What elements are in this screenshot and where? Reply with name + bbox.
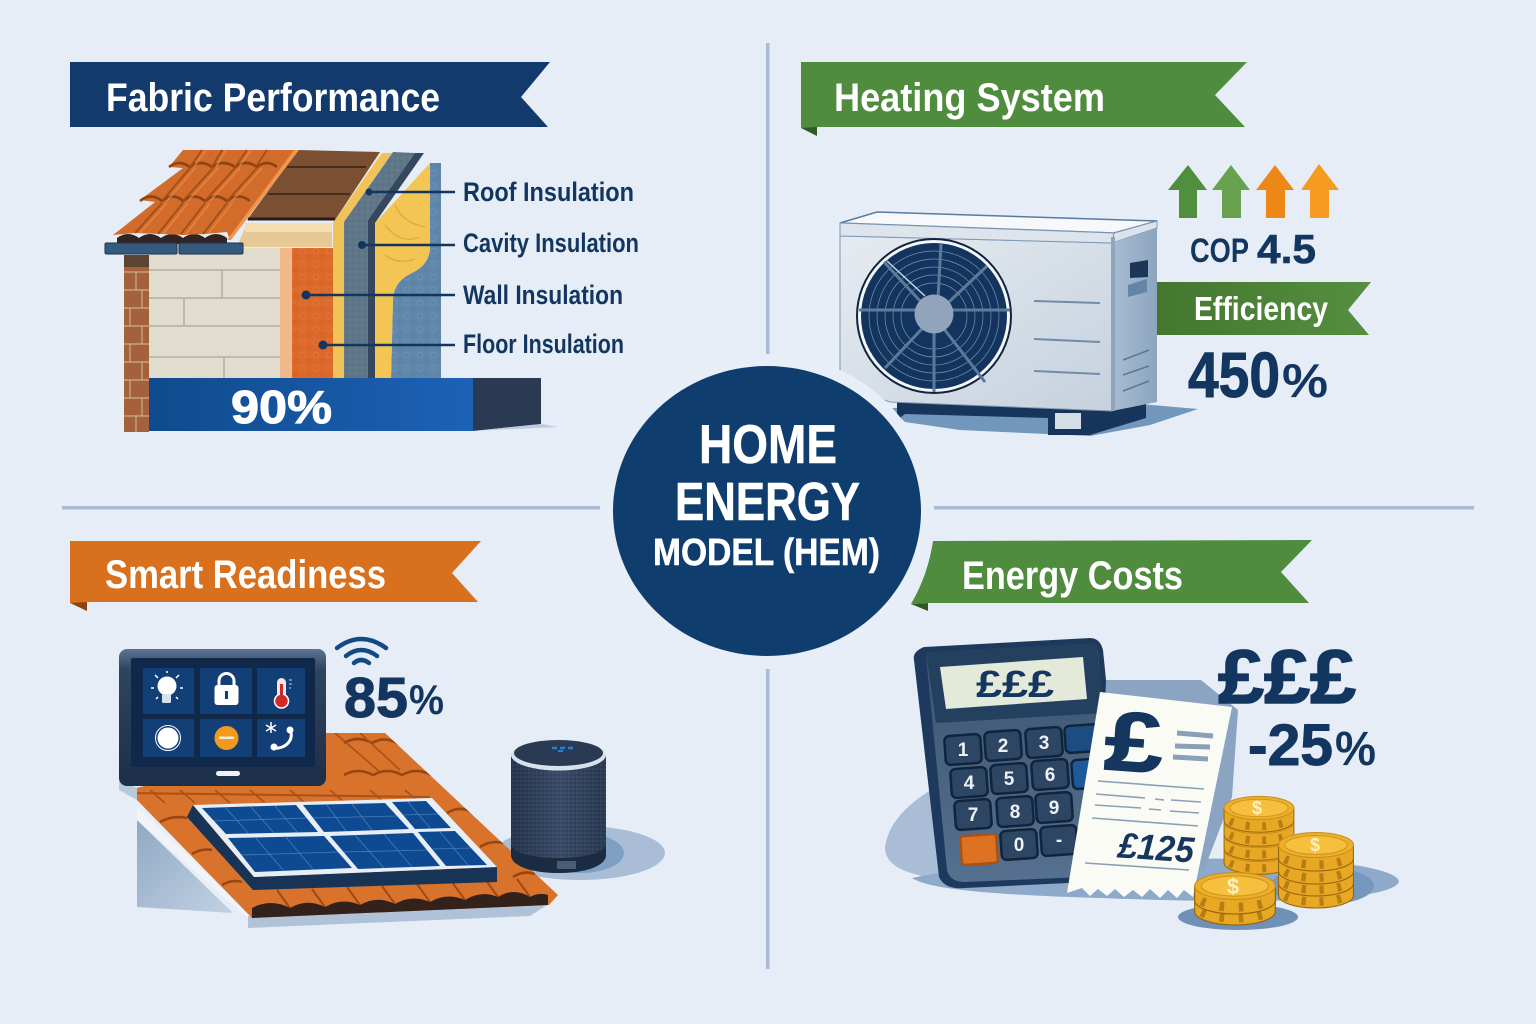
title text: MODEL (HEM) [653,532,880,574]
calculator keys: 1 [958,740,969,761]
calculator keys: 8 [1010,802,1020,823]
title text: HOME [699,413,837,475]
calculator display: £££ [976,664,1054,706]
speaker shadow [495,826,665,880]
calculator [914,638,1125,888]
title text [653,413,880,574]
supporting wall [137,806,547,928]
calculator keys: 6 [1045,765,1055,786]
panel: smart readiness [70,541,665,928]
coin stacks [1195,796,1353,925]
label: Wall Insulation [302,280,623,310]
central title badge [601,354,933,668]
efficiency ribbon: Efficiency [1194,290,1329,327]
receipt: £125 [1116,824,1196,871]
value: £££: £££ [1218,635,1356,720]
banner: Heating System [801,62,1247,136]
value: 85%: % [409,676,444,723]
house cross-section illustration [105,150,558,433]
coin stack front [1195,873,1275,925]
90% slab: 90% [231,381,332,433]
roof tiles [113,150,299,244]
efficiency ribbon [1157,282,1371,335]
receipt: £ [1102,693,1166,791]
heat pump unit [840,212,1198,436]
label: Cavity Insulation: Cavity Insulation [463,228,639,258]
label: Cavity Insulation [358,228,639,258]
smart speaker [511,740,606,873]
banner: Fabric Performance: Fabric Performance [106,76,440,120]
icon: padlock [214,674,238,705]
label: Roof Insulation [366,177,634,207]
COP value [1190,226,1316,272]
calculator keys: 9 [1049,798,1059,819]
label: Roof Insulation: Roof Insulation [463,177,634,207]
COP value: 4.5 [1257,226,1316,272]
coin stack right [1279,833,1353,908]
calculator keys: 2 [998,736,1008,757]
calculator keys: 4 [964,773,975,794]
unit shadow [890,404,1198,436]
coin stack right: $ [1310,835,1320,855]
calculator display [940,657,1087,709]
coin stack back [1224,796,1294,874]
efficiency value: % [1282,354,1328,407]
gutter [105,243,243,254]
banner: Smart Readiness [70,541,481,611]
COP value: COP [1190,232,1249,270]
value: -25%: % [1335,723,1376,776]
label: Wall Insulation: Wall Insulation [463,280,623,310]
unit feet [897,400,1146,435]
roof tiles [130,733,558,918]
block wall [149,248,280,378]
calculator keys: - [1056,830,1062,851]
banner: Heating System: Heating System [834,76,1105,120]
unit body [840,212,1157,411]
coin stack front: $ [1227,874,1239,899]
banner: Smart Readiness: Smart Readiness [105,553,386,597]
icon: light bulb [151,671,183,703]
solar panel [187,798,497,890]
wall layers [280,152,441,378]
calculator keys [944,724,1109,865]
calculator keys: 7 [968,805,978,826]
panel: heating system [801,62,1371,436]
banner: Energy Costs [911,540,1312,611]
title text: ENERGY [675,472,860,532]
panel: energy costs [885,540,1399,930]
tablet [119,649,326,800]
label: Floor Insulation [318,329,624,359]
brick column [124,255,149,432]
coin stack back: $ [1252,798,1262,818]
calculator keys: 3 [1039,733,1049,754]
receipt [1067,692,1232,898]
value: 85%: 85 [344,666,408,730]
efficiency value: 450 [1188,339,1280,411]
icon: star and phone [266,722,294,750]
wifi icon [337,639,386,663]
value: -25% [1248,713,1376,778]
icon: white circle [156,726,180,750]
banner: Fabric Performance [70,62,550,127]
roof underlay [237,150,380,247]
fan [857,239,1011,393]
back sheet [1100,680,1238,870]
value: -25%: -25 [1248,713,1333,778]
desk shadows [885,788,1399,930]
icon: orange minus [214,726,238,750]
panel: fabric performance [70,62,639,433]
value: 85% [344,666,444,730]
calculator keys: 5 [1004,769,1015,790]
calculator keys: 0 [1014,835,1024,856]
90% slab [149,378,558,433]
roof with solar panel [130,733,558,928]
efficiency arrows [1168,164,1339,218]
banner: Energy Costs: Energy Costs [962,554,1183,598]
label: Floor Insulation: Floor Insulation [463,329,624,359]
icon: thermometer [274,678,292,708]
